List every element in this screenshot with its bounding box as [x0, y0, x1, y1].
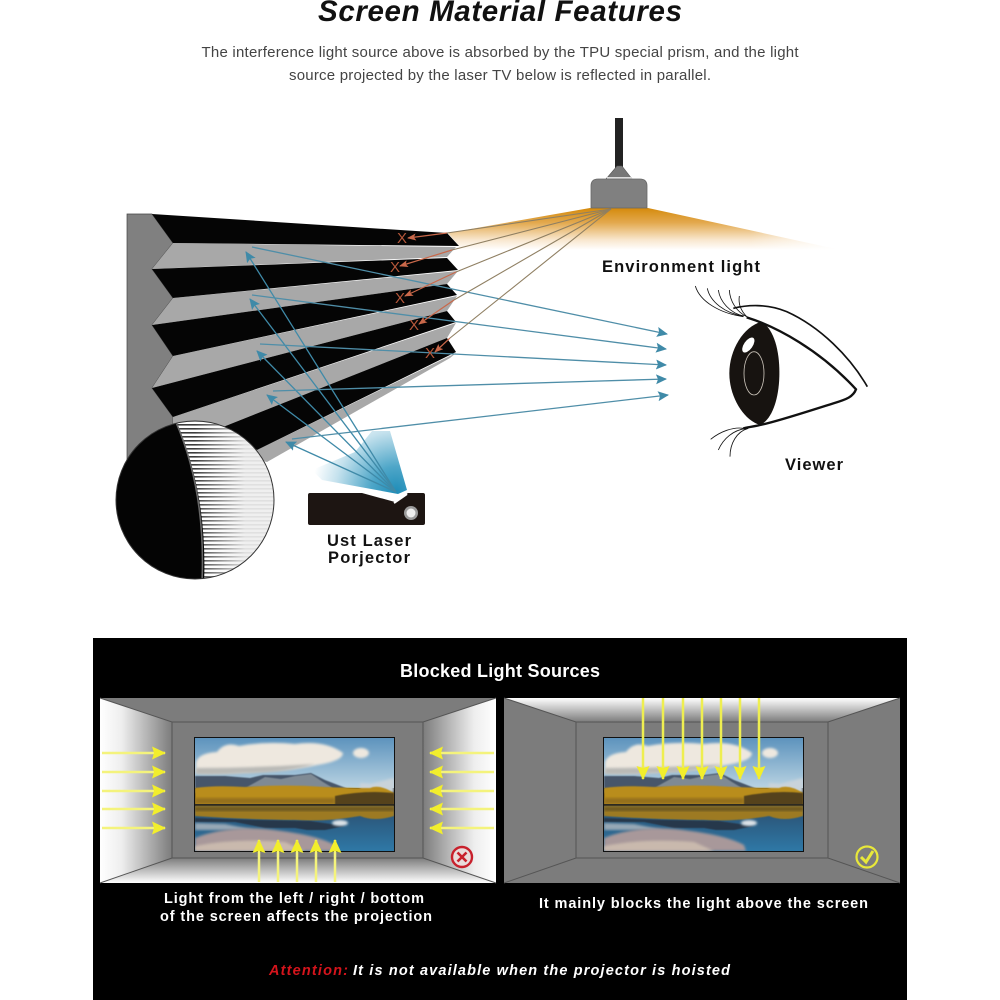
blocked light X marks: X [425, 345, 435, 362]
blocked light X marks: X [397, 230, 407, 247]
label: UST laser projector: Porjector [328, 549, 411, 567]
icon: eye [695, 286, 867, 457]
projected landscape photo [194, 737, 395, 852]
icon: ceiling projector [591, 118, 647, 208]
blocked light X marks: X [409, 317, 419, 334]
projected landscape photo [603, 737, 804, 852]
lens outline [116, 421, 274, 579]
panel heading: Blocked Light Sources [400, 661, 600, 681]
caption: right room: It mainly blocks the light above the screen [539, 896, 868, 912]
left yellow arrows [102, 753, 165, 828]
icon: laser projector [308, 493, 425, 525]
attention note: It is not available when the projector is hoisted [353, 963, 731, 979]
magnifier lens [116, 422, 274, 578]
intro text block: source projected by the laser TV below is reflected in parallel. [289, 67, 711, 84]
pleated screen material [127, 214, 459, 472]
blocked light X marks: X [390, 259, 400, 276]
caption: left room: Light from the left / right / bottom [164, 891, 424, 907]
environment light fan [448, 205, 855, 262]
bottom yellow arrows [259, 840, 335, 882]
caption: left room [160, 891, 432, 925]
gray reflective pleats [152, 243, 458, 462]
intro text block [202, 44, 799, 84]
room: light from above [504, 698, 900, 883]
label: UST laser projector: Ust Laser [327, 532, 412, 550]
incident projector rays [246, 252, 396, 492]
environment light rays [400, 209, 611, 352]
projector light cone [312, 431, 407, 494]
blocked light X marks [390, 230, 435, 362]
label: UST laser projector [327, 532, 412, 567]
panel: blocked light sources [93, 638, 907, 1000]
label: viewer: Viewer [785, 456, 844, 474]
label: environment light: Environment light [602, 258, 760, 276]
reflected rays toward viewer [252, 247, 668, 439]
room: light from sides and bottom [100, 698, 496, 883]
black absorbing pleats [152, 214, 459, 450]
panel background [93, 638, 907, 1000]
attention note: Attention: [268, 963, 348, 979]
blocked light X marks: X [395, 290, 405, 307]
top yellow arrows [643, 698, 759, 779]
caption: left room: of the screen affects the projection [160, 909, 432, 925]
icon: yellow check [856, 846, 878, 868]
screen backing wall [127, 214, 173, 472]
icon: red cross [452, 847, 472, 867]
intro text block: The interference light source above is absorbed by the TPU special prism, and the light [202, 44, 799, 61]
right yellow arrows [430, 753, 494, 828]
